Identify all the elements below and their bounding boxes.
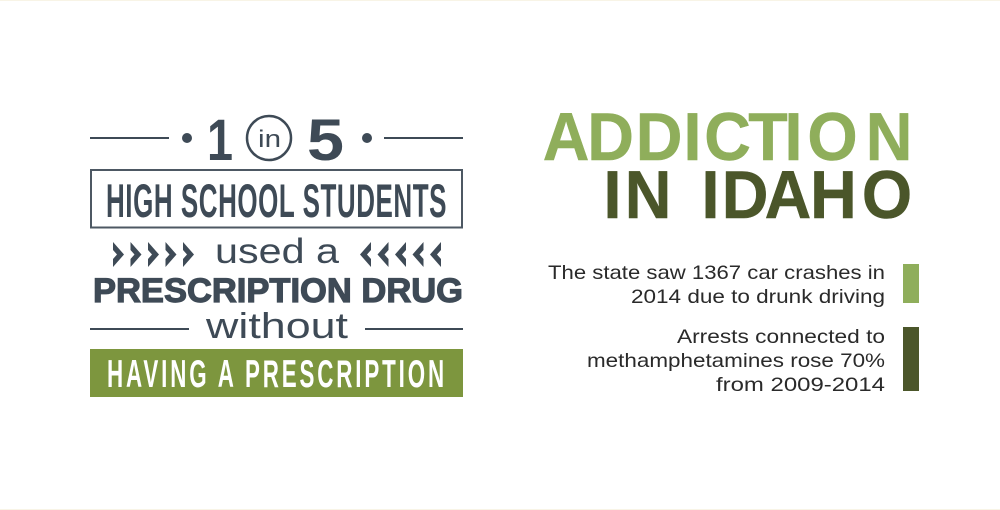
headline: 1 in 5 [90, 108, 463, 173]
text: arrests fact: Arrests connected to [677, 326, 885, 348]
text: prescription drug: PRESCRIPTION DRUG [93, 272, 463, 310]
headline: 1 in 5: 5 [307, 108, 344, 173]
banner: having a prescription [90, 349, 463, 397]
text: used a: used a [215, 232, 340, 271]
text: arrests fact: from 2009-2014 [716, 374, 885, 396]
text: car crashes fact: 2014 due to drunk driving [631, 286, 885, 308]
boxed heading: high school students: HIGH SCHOOL STUDENTS [106, 174, 447, 227]
text: car crashes fact [548, 262, 885, 308]
banner: having a prescription: HAVING A PRESCRIPTION [107, 353, 447, 396]
title: addiction in Idaho: IN IDAHO [604, 158, 912, 233]
icon: left-pointing chevrons [360, 242, 441, 267]
panel: 1 in 5 statistic [90, 108, 463, 397]
bar: dark green marker [903, 327, 919, 391]
headline: 1 in 5: 1 [207, 108, 233, 173]
headline: 1 in 5: in [258, 126, 281, 153]
text: car crashes fact: The state saw 1367 car crashes in [548, 262, 885, 284]
title: addiction in Idaho [543, 100, 912, 233]
panel: fact on drunk driving [548, 262, 919, 308]
panel: fact on methamphetamine arrests [587, 326, 919, 396]
bar: light green marker [903, 264, 919, 303]
text: without with rules: without [205, 305, 348, 346]
boxed heading: high school students [91, 170, 462, 228]
title: addiction in Idaho: ADDICTION [543, 100, 912, 175]
text: arrests fact: methamphetamines rose 70% [587, 350, 885, 372]
text: arrests fact [587, 326, 885, 396]
icon: right-pointing chevrons [113, 242, 194, 267]
